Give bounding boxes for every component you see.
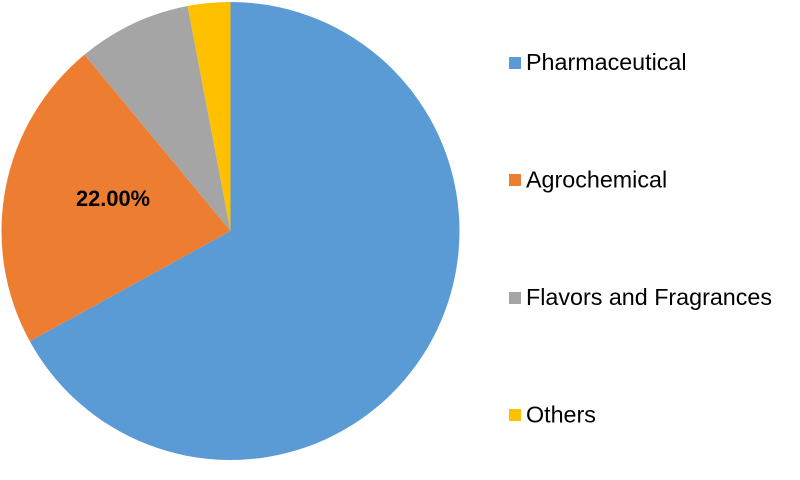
slice: Flavors and Fragrances: [84, 6, 230, 231]
legend item: Flavors and Fragrances: Flavors and Fragrances: [526, 284, 772, 310]
pie chart: [1, 2, 459, 460]
slice: Others: [188, 2, 230, 231]
legend item: Others: Others: [526, 402, 596, 428]
legend item: Agrochemical: Agrochemical: [526, 166, 667, 192]
slice: Agrochemical: [1, 55, 231, 341]
data label: 22.00%: 22.00%: [76, 186, 150, 211]
legend: [509, 49, 772, 428]
legend item: Pharmaceutical: Pharmaceutical: [526, 49, 687, 75]
slice: Pharmaceutical: [30, 2, 459, 460]
